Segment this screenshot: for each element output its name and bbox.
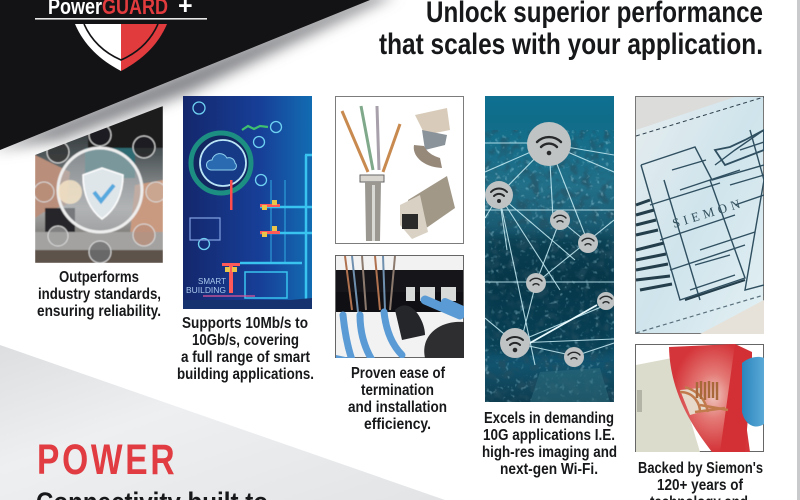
photo: shield and hands (34, 106, 166, 263)
PowerGUARD logo (35, 0, 207, 71)
caption: 120+ years of (657, 477, 744, 494)
caption: Backed by Siemon's (638, 460, 763, 477)
panel: 10G applications (482, 96, 617, 478)
caption: Supports 10Mb/s to (182, 315, 308, 332)
photo: neon smart building: BUILDING (186, 286, 226, 295)
caption: 10G applications I.E. (483, 427, 615, 444)
caption: next-gen Wi-Fi. (500, 461, 598, 478)
caption: Outperforms (59, 269, 139, 286)
grey bottom triangle (0, 345, 445, 500)
photo: neon smart building (183, 96, 312, 309)
caption (37, 269, 161, 320)
photo: engineering blueprint (636, 96, 764, 334)
caption: a full range of smart (181, 349, 310, 366)
caption (638, 460, 763, 500)
caption: Proven ease of (351, 365, 446, 382)
caption: efficiency. (364, 416, 431, 433)
POWER heading: POWER (37, 436, 177, 484)
diagonal shadow under black band (0, 0, 396, 150)
caption (177, 315, 314, 383)
caption: high-res imaging and (482, 444, 617, 461)
black diagonal band (0, 0, 370, 150)
panel: reliability (34, 106, 166, 320)
caption: Excels in demanding (484, 410, 614, 427)
caption: industry standards, (38, 286, 161, 303)
panel: installation (336, 256, 464, 433)
photo: patch panel with blue cables (336, 256, 464, 360)
headline (379, 0, 763, 61)
caption: building applications. (177, 366, 314, 383)
logo shield (75, 24, 167, 71)
caption (482, 410, 617, 478)
caption (348, 365, 447, 433)
photo: cable and connectors (336, 96, 464, 244)
photo: city Wi-Fi network (485, 96, 615, 402)
caption: and installation (348, 399, 447, 416)
caption: termination (361, 382, 434, 399)
panel: heritage (636, 344, 764, 500)
caption: 10Gb/s, covering (192, 332, 299, 349)
photo: red cutaway jack (636, 344, 764, 452)
caption: ensuring reliability. (37, 303, 161, 320)
photo: engineering blueprint: SIEMON (670, 196, 742, 231)
panel: smart building (177, 96, 314, 383)
photo: neon smart building: SMART (198, 277, 226, 286)
